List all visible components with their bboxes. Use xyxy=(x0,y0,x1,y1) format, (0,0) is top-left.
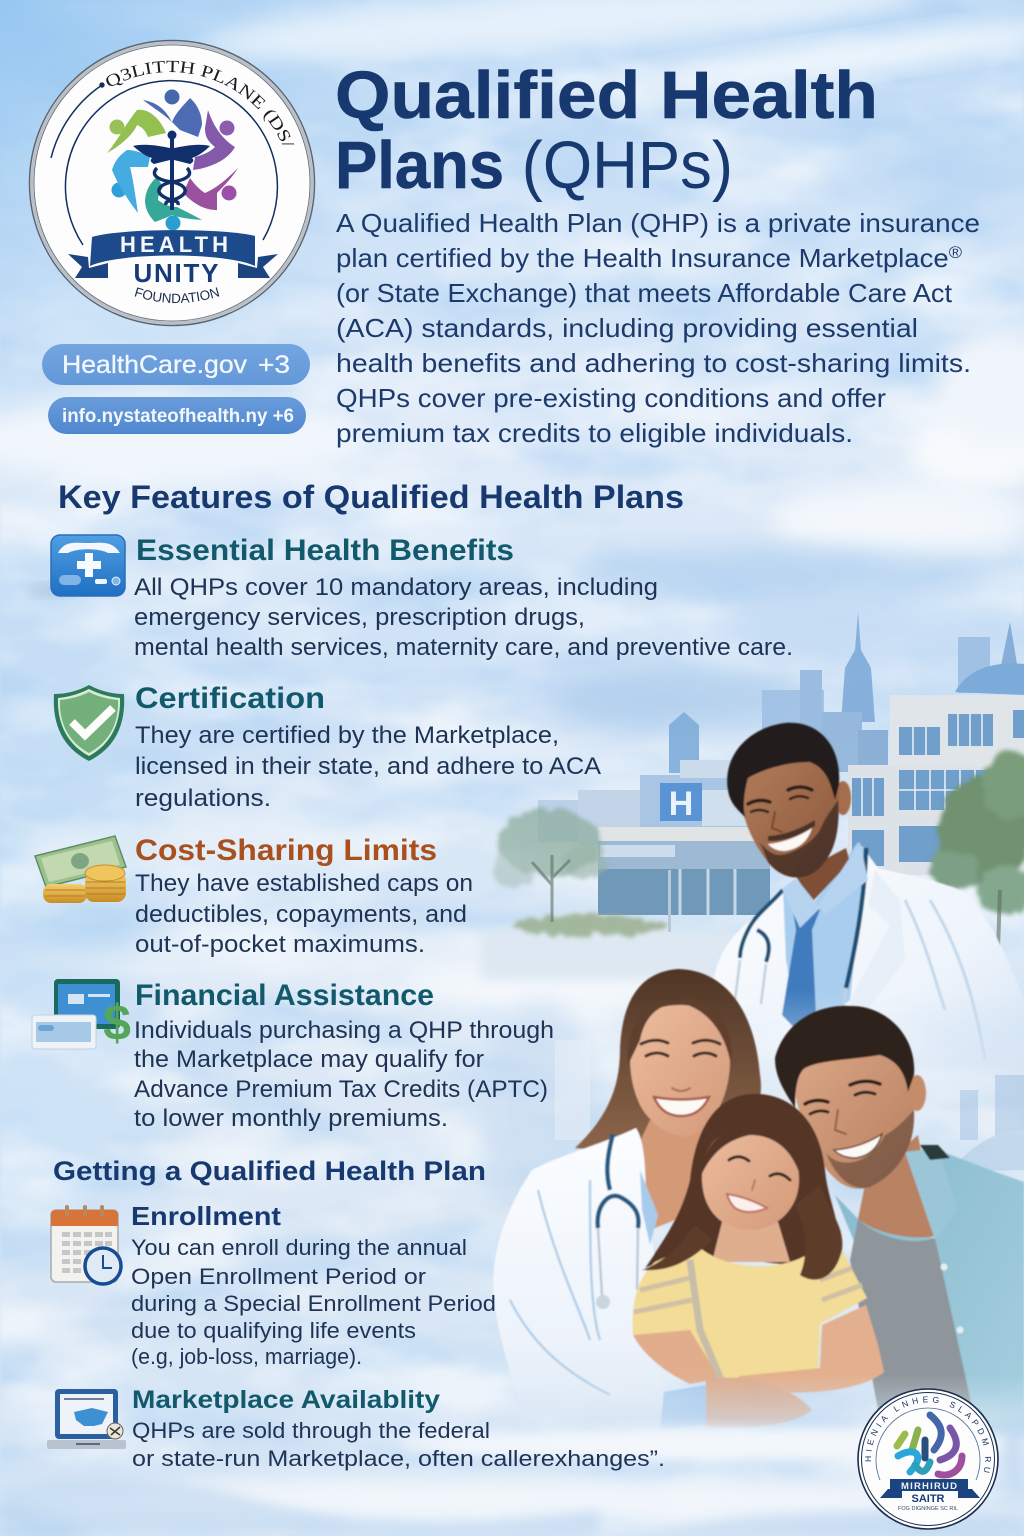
logo ribbon xyxy=(68,230,278,306)
mother face xyxy=(630,1005,730,1137)
mother cuff xyxy=(660,1385,706,1430)
mother hand xyxy=(706,1378,812,1428)
description: out-of-pocket maximums. xyxy=(135,931,425,958)
father smile xyxy=(834,1134,882,1158)
child smile xyxy=(727,1194,767,1212)
intro paragraph: A Qualified Health Plan (QHP) is a private insurance xyxy=(336,208,980,238)
doctor eyes and brows xyxy=(748,787,812,832)
icon: monitor, card and dollar xyxy=(32,979,131,1051)
mother hair xyxy=(575,969,761,1150)
source pill: info.nystateofhealth.ny: info.nystateofhealth.ny +6 xyxy=(62,405,294,427)
description: QHPs are sold through the federal xyxy=(132,1418,490,1443)
intro paragraph: health benefits and adhering to cost-sharing limits. xyxy=(336,348,971,378)
child arm left xyxy=(633,1328,725,1384)
description: emergency services, prescription drugs, xyxy=(134,604,585,631)
feature: cost-sharing limits xyxy=(35,834,473,958)
father t-shirt xyxy=(850,1219,975,1420)
icon: medical kit xyxy=(24,535,125,596)
description xyxy=(135,722,601,812)
small logo colored figures xyxy=(897,1415,962,1475)
child xyxy=(632,1094,884,1428)
description: They are certified by the Marketplace, xyxy=(135,722,559,749)
mother stethoscope xyxy=(598,1134,638,1296)
mother xyxy=(493,969,761,1432)
heading: key features: Key Features of Qualified Health Plans xyxy=(58,479,684,515)
icon: laptop with map xyxy=(47,1389,126,1449)
description xyxy=(134,574,793,661)
father ear xyxy=(908,1075,926,1111)
description: Open Enrollment Period or xyxy=(131,1264,426,1289)
doctor neck xyxy=(795,848,850,902)
father eyes and brows xyxy=(805,1081,880,1134)
heading: getting a plan: Getting a Qualified Health Plan xyxy=(53,1156,486,1186)
small logo arc text: HIENIA LNHEG SLAPDM RUG xyxy=(865,1396,991,1473)
description xyxy=(134,1017,554,1132)
small logo ribbon banner xyxy=(890,1479,968,1491)
hospital H sign: H xyxy=(669,785,693,823)
mother, father and child xyxy=(493,969,1024,1480)
intro paragraph: (ACA) standards, including providing essential xyxy=(336,313,918,343)
title xyxy=(335,58,878,203)
description: during a Special Enrollment Period xyxy=(131,1291,496,1316)
father open shirt xyxy=(835,1152,1024,1436)
logo badge xyxy=(28,40,316,326)
description: (e.g, job-loss, marriage). xyxy=(131,1344,362,1369)
feature: essential health benefits xyxy=(24,534,793,661)
description: regulations. xyxy=(135,785,271,812)
intro paragraph: (or State Exchange) that meets Affordable Care Act xyxy=(336,278,953,308)
source pill: HealthCare.gov xyxy=(42,344,310,385)
doctor face xyxy=(741,752,839,877)
description: due to qualifying life events xyxy=(131,1318,416,1343)
description xyxy=(132,1418,665,1471)
doctor shirt xyxy=(782,842,865,1012)
pale distant buildings xyxy=(555,1040,1024,1172)
section: enrollment: Enrollment xyxy=(131,1201,281,1231)
logo arcs xyxy=(51,81,277,245)
description: deductibles, copayments, and xyxy=(135,901,467,928)
feature: financial assistance: Financial Assistance xyxy=(135,979,434,1012)
description: All QHPs cover 10 mandatory areas, including xyxy=(134,574,658,601)
small logo badge: FOG DIGNINGE SC RIL xyxy=(898,1506,958,1512)
child yellow t-shirt xyxy=(632,1243,867,1382)
description xyxy=(135,870,473,958)
child arm right xyxy=(720,1305,884,1393)
child eyes xyxy=(729,1157,790,1190)
doctor xyxy=(712,723,1024,1110)
doctor smile xyxy=(768,828,812,851)
logo pinwheel figures xyxy=(107,90,238,230)
section: marketplace availability xyxy=(47,1386,665,1471)
city skyline xyxy=(669,612,1024,773)
bottom white drapery xyxy=(0,1400,1024,1536)
father neck xyxy=(858,1135,936,1237)
source pill: HealthCare.gov: HealthCare.gov xyxy=(62,351,248,379)
child hair back xyxy=(645,1094,838,1268)
description: Individuals purchasing a QHP through xyxy=(134,1017,554,1044)
description: mental health services, maternity care, and preventive care. xyxy=(134,634,793,661)
intro paragraph xyxy=(336,208,980,448)
doctor tie xyxy=(782,905,820,1034)
logo ribbon: HEALTH xyxy=(120,232,228,257)
doctor lab coat xyxy=(714,846,1024,1076)
description: to lower monthly premiums. xyxy=(134,1105,448,1132)
source pill: HealthCare.gov: +3 xyxy=(258,351,290,379)
father hair xyxy=(775,1006,914,1108)
feature: essential health benefits: Essential Health Benefits xyxy=(136,534,514,567)
small logo badge: MIRHIRUD xyxy=(901,1481,957,1492)
child neck xyxy=(712,1222,790,1262)
icon: green shield xyxy=(54,685,124,761)
logo ribbon: UNITY xyxy=(134,258,218,288)
section: marketplace availability: Marketplace Availablity xyxy=(132,1386,440,1414)
description: the Marketplace may qualify for xyxy=(134,1046,484,1073)
intro paragraph: plan certified by the Health Insurance Marketplace xyxy=(336,243,914,273)
feature: certification xyxy=(54,682,601,812)
logo caduceus xyxy=(133,130,210,210)
small logo ribbon tails xyxy=(880,1489,980,1498)
mother neck xyxy=(636,1120,725,1230)
icon: monitor, card and dollar: $ xyxy=(103,995,131,1051)
father xyxy=(775,1006,1024,1480)
section: enrollment xyxy=(51,1201,496,1369)
description xyxy=(131,1235,496,1369)
mother lab coat xyxy=(493,1128,706,1432)
icon: calendar and clock xyxy=(51,1205,121,1284)
doctor beard xyxy=(760,800,838,877)
doctor stethoscope xyxy=(735,848,866,1010)
doctor hair xyxy=(727,723,839,818)
description: They have established caps on xyxy=(135,870,473,897)
child face xyxy=(702,1128,799,1230)
child hair strands xyxy=(642,1185,842,1280)
intro paragraph: premium tax credits to eligible individuals. xyxy=(336,418,853,448)
trees and grounds xyxy=(480,749,1024,980)
doctor shirt collar xyxy=(782,842,868,928)
intro paragraph: ® xyxy=(949,243,962,262)
source pill: info.nystateofhealth.ny xyxy=(48,397,306,434)
title: Plans (QHPs) xyxy=(335,128,733,203)
father stubble xyxy=(826,1110,914,1188)
description: You can enroll during the annual xyxy=(131,1235,467,1260)
logo ribbon: FOUNDATION xyxy=(134,287,220,303)
description: or state-run Marketplace, often callerexhanges”. xyxy=(132,1446,665,1471)
hospital H sign xyxy=(660,783,702,823)
hospital building xyxy=(538,695,1024,915)
father face xyxy=(794,1041,914,1189)
mother smile xyxy=(654,1097,709,1116)
feature: cost-sharing limits: Cost-Sharing Limits xyxy=(135,834,437,867)
intro paragraph: QHPs cover pre-existing conditions and offer xyxy=(336,383,886,413)
logo arc text: Q3LITTH PLANE (DS/ xyxy=(106,60,294,144)
mother eyes and brows xyxy=(641,1040,720,1091)
small logo badge: SAITR xyxy=(912,1493,945,1505)
feature: certification: Certification xyxy=(135,682,325,715)
description: Advance Premium Tax Credits (APTC) xyxy=(134,1076,548,1103)
description: licensed in their state, and adhere to ACA xyxy=(135,753,601,780)
doctor ear xyxy=(835,781,851,815)
title: Qualified Health xyxy=(335,58,878,133)
feature: financial assistance xyxy=(32,979,554,1132)
icon: cash and coins xyxy=(35,836,126,903)
